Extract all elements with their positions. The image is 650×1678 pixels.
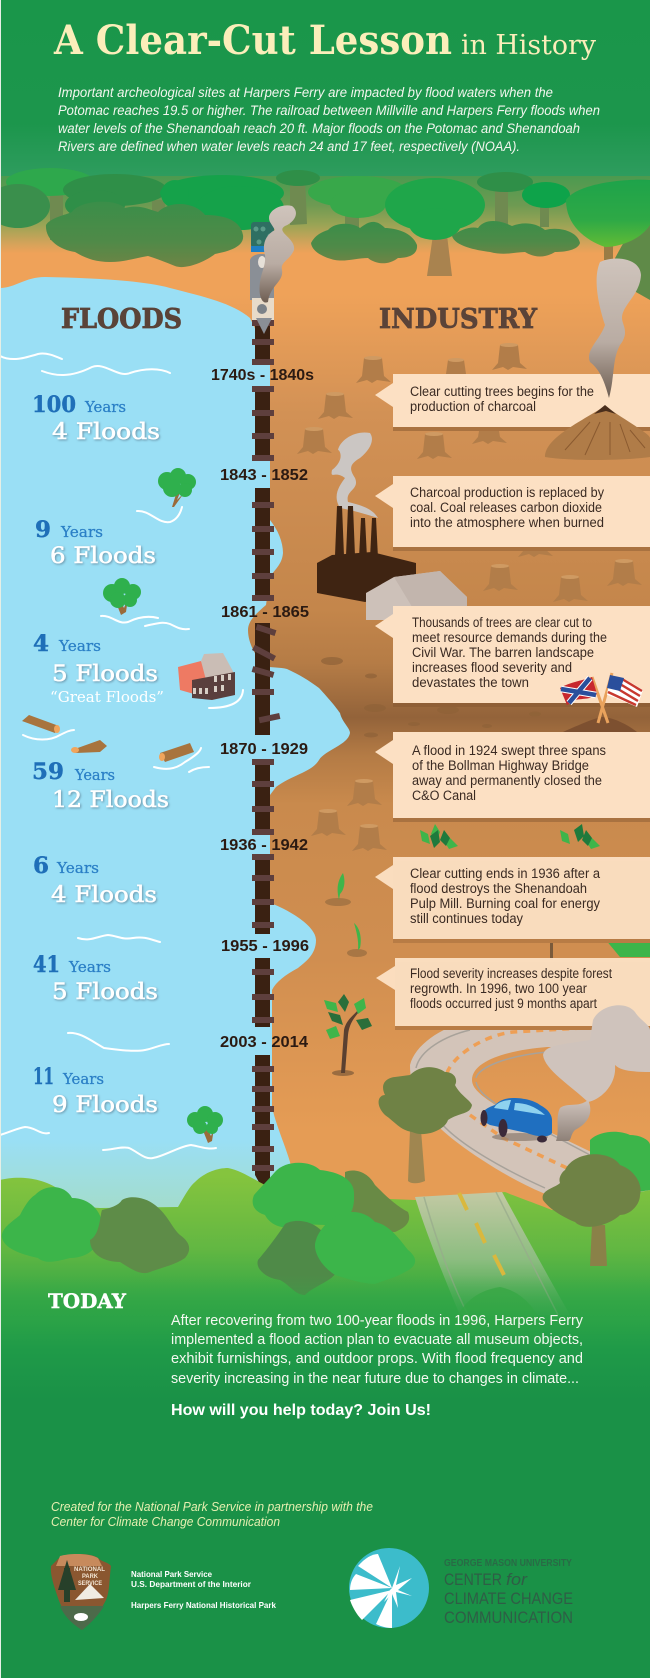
flood stat: 9 years: [35, 517, 156, 569]
center olive bush: [345, 1171, 409, 1232]
climate change center text: COMMUNICATION: [444, 1608, 573, 1627]
credit line: [51, 1499, 373, 1529]
callout: 1936: Pulp Mill. Burning coal for energy: [410, 896, 600, 911]
factory with smoke: [317, 432, 416, 602]
credit line: Center for Climate Change Communication: [51, 1514, 280, 1529]
left edge line: [0, 0, 1, 1678]
flood stat: 4 years: [33, 631, 164, 706]
today text: implemented a flood action plan to evacuate all museum objects,: [171, 1331, 583, 1348]
callout: 1955: Flood severity increases despite forest: [410, 966, 612, 981]
callout: 1870: A flood in 1924 swept three spans: [412, 743, 606, 758]
callout: 1870: of the Bollman Highway Bridge: [412, 758, 589, 773]
today text: [171, 1312, 583, 1387]
right forest tree: [566, 180, 650, 300]
title: A Clear-Cut Lesson: [53, 17, 452, 64]
nps text: National Park Service: [131, 1569, 212, 1579]
lower olive bush: [257, 1221, 338, 1295]
logo: national park service arrowhead: SERVICE: [78, 1581, 102, 1587]
climate change center text: GEORGE MASON UNIVERSITY: [444, 1558, 572, 1569]
icon: floating tree 1: [158, 468, 196, 507]
callout: 1955: floods occurred just 9 months apart: [410, 996, 597, 1011]
nps text: U.S. Department of the Interior: [131, 1579, 252, 1589]
flood stat: 59 years: 12 Floods: [52, 788, 169, 813]
olive bushes: [46, 202, 580, 267]
dark back tree left: [0, 184, 50, 228]
today heading: TODAY: [48, 1289, 127, 1313]
today text: After recovering from two 100-year floods in 1996, Harpers Ferry: [171, 1312, 583, 1329]
flood stat: 41 years: 5 Floods: [52, 980, 158, 1005]
left olive bush: [90, 1197, 189, 1273]
logo: national park service arrowhead: NATIONAL: [74, 1567, 105, 1573]
flood stat: 100 years: [32, 392, 160, 445]
wave lines: [0, 353, 243, 1158]
flood stat: 4 years: “Great Floods”: [50, 688, 164, 706]
sprout 2: [347, 923, 367, 957]
intro text: Important archeological sites at Harpers Ferry are impacted by flood waters when the: [58, 85, 553, 100]
intro text: Potomac reaches 19.5 or higher. The railroad between Millville and Harpers Ferry floods when: [58, 103, 600, 118]
icons: floating logs: [22, 715, 194, 762]
hillside: [0, 1168, 650, 1410]
train smoke: [259, 205, 296, 303]
track segments: [252, 320, 280, 1195]
callout: 1861: [375, 606, 650, 707]
tree stumps: [297, 343, 642, 851]
climate change center text: CENTER: [444, 1570, 502, 1589]
icon: blue car: [480, 1098, 552, 1142]
flood stat: 4 years: Years: [58, 637, 101, 655]
forest background trees: [0, 168, 650, 300]
callout: 1955: [376, 958, 650, 1030]
flood stat: 11 years: [33, 1064, 158, 1118]
nps text: Harpers Ferry National Historical Park: [131, 1600, 276, 1610]
credit line: Created for the National Park Service in partnership with the: [51, 1499, 373, 1514]
flood stat: 41 years: [33, 952, 158, 1005]
title: in History: [461, 30, 597, 61]
lower green bush: [315, 1212, 415, 1284]
callout: 1861: increases flood severity and: [412, 660, 572, 675]
callout: 1861: Civil War. The barren landscape: [412, 645, 594, 660]
lower road: [415, 1192, 570, 1315]
callout: 1740s: production of charcoal: [410, 399, 536, 414]
callout: 1740s: [375, 374, 650, 431]
railroad ties: [252, 320, 280, 1171]
background sapling behind callouts: [550, 870, 650, 960]
smoke cloud: [543, 1005, 650, 1141]
nps text: [131, 1569, 276, 1610]
light back tree left: [6, 168, 94, 196]
flood stat: 100 years: 4 Floods: [52, 420, 160, 445]
far right green bush: [590, 1132, 650, 1195]
flood stat: 100 years: 100: [32, 392, 76, 418]
logo: national park service arrowhead: [51, 1554, 111, 1630]
left green bush: [2, 1187, 102, 1262]
year labels: 1955 - 1996: [221, 938, 309, 955]
flood stat: 9 years: 6 Floods: [50, 544, 156, 569]
collapsed grey building: [366, 571, 467, 620]
small bright tree: [522, 182, 570, 208]
flood stat: 11 years: 9 Floods: [52, 1093, 158, 1118]
callout: 1936: still continues today: [410, 911, 523, 926]
callout: 1870: C&O Canal: [412, 788, 476, 803]
icon: floating tree 3: [187, 1106, 223, 1143]
callout: 1861: devastates the town: [412, 675, 529, 690]
flood stat: 59 years: [32, 759, 169, 813]
flood stat: 4 years: 4: [33, 631, 49, 657]
climate change center text: for: [506, 1570, 528, 1589]
flood stat: 59 years: 59: [32, 759, 64, 785]
callout: 1861: meet resource demands during the: [412, 630, 607, 645]
flood stat: 6 years: Years: [56, 859, 99, 877]
callout: 1955: regrowth. In 1996, two 100 year: [410, 981, 587, 996]
climate change center text: [444, 1558, 573, 1627]
flood stat: 100 years: Years: [84, 398, 126, 416]
callout: 1936: flood destroys the Shenandoah: [410, 881, 587, 896]
year labels: 1843 - 1852: [220, 467, 308, 484]
river water: [0, 277, 350, 1215]
ground background: [0, 175, 650, 1275]
callout: 1936: [375, 857, 650, 943]
year labels: 1740s - 1840s: [211, 367, 314, 384]
bright back tree: [160, 175, 284, 230]
flood stat: 59 years: Years: [74, 766, 115, 784]
today text: severity increasing in the near future due to changes in climate...: [171, 1370, 579, 1387]
icon: floating tree 2: [103, 578, 141, 615]
callout: 1861: Thousands of trees are clear cut to: [412, 615, 592, 630]
forest foreground trees: [2, 1132, 650, 1350]
flood stat: 6 years: 4 Floods: [51, 883, 157, 908]
callout: 1740s: Clear cutting trees begins for the: [410, 384, 594, 399]
mid back tree: [308, 176, 408, 218]
intro text: water levels of the Shenandoah reach 20 ft. Major floods on the Potomac and Shenandoah: [58, 121, 580, 136]
icon: flooded house: [178, 653, 235, 700]
flood stat: 9 years: Years: [60, 523, 103, 541]
factory smoke: [332, 432, 378, 518]
callout: 1843: coal. Coal releases carbon dioxide: [410, 500, 602, 515]
today text: exhibit furnishings, and outdoor props. With flood frequency and: [171, 1350, 583, 1367]
icon: charcoal mound with smoke: [545, 258, 650, 460]
sprout 1: [325, 873, 351, 906]
intro text: [58, 85, 600, 154]
flood stat: 41 years: 41: [33, 952, 60, 978]
young tree: [324, 994, 372, 1076]
logo: climate change communication: [349, 1548, 429, 1628]
flood stat: 4 years: 5 Floods: [52, 662, 158, 687]
flood stat: 9 years: 9: [35, 517, 51, 543]
year labels: 2003 - 2014: [220, 1034, 308, 1051]
logo: national park service arrowhead: PARK: [82, 1574, 99, 1580]
callout: 1936: Clear cutting ends in 1936 after a: [410, 866, 600, 881]
ground spots: [321, 657, 541, 738]
callout: 1843: Charcoal production is replaced by: [410, 485, 604, 500]
icon: crossed flags: [560, 673, 643, 732]
main forest tree: [385, 178, 485, 276]
flood stat: 6 years: [33, 853, 157, 908]
callout: 1870: away and permanently closed the: [412, 773, 602, 788]
heading: industry: INDUSTRY: [379, 304, 538, 335]
road-side olive tree: [379, 1067, 472, 1183]
climate change center text: CLIMATE CHANGE: [444, 1589, 573, 1608]
heading: floods: FLOODS: [61, 304, 182, 335]
year labels: 1870 - 1929: [220, 741, 308, 758]
header panel: [0, 0, 650, 176]
flood stat: 11 years: Years: [62, 1070, 104, 1088]
intro text: Rivers are defined when water levels reach 24 and 17 feet, respectively (NOAA).: [58, 139, 520, 154]
faint bush by road: [450, 1287, 550, 1350]
call to action: How will you help today? Join Us!: [171, 1402, 431, 1419]
flood stat: 6 years: 6: [33, 853, 49, 879]
flood stat: 41 years: Years: [68, 958, 111, 976]
bottom green panel: [0, 1275, 650, 1678]
year labels: 1861 - 1865: [221, 604, 309, 621]
flood stat: 11 years: 11: [33, 1064, 54, 1090]
year labels: 1936 - 1942: [220, 837, 308, 854]
icon: train with smoke: [250, 205, 296, 334]
callout: 1870: [375, 732, 650, 822]
winding road: [410, 1020, 650, 1220]
callout: 1843: into the atmosphere when burned: [410, 515, 604, 530]
right olive tree: [543, 1154, 641, 1266]
year labels: [211, 367, 314, 1051]
callout: 1843: [375, 476, 650, 551]
saplings above callout 5: [420, 824, 600, 849]
center green bush: [253, 1163, 354, 1227]
